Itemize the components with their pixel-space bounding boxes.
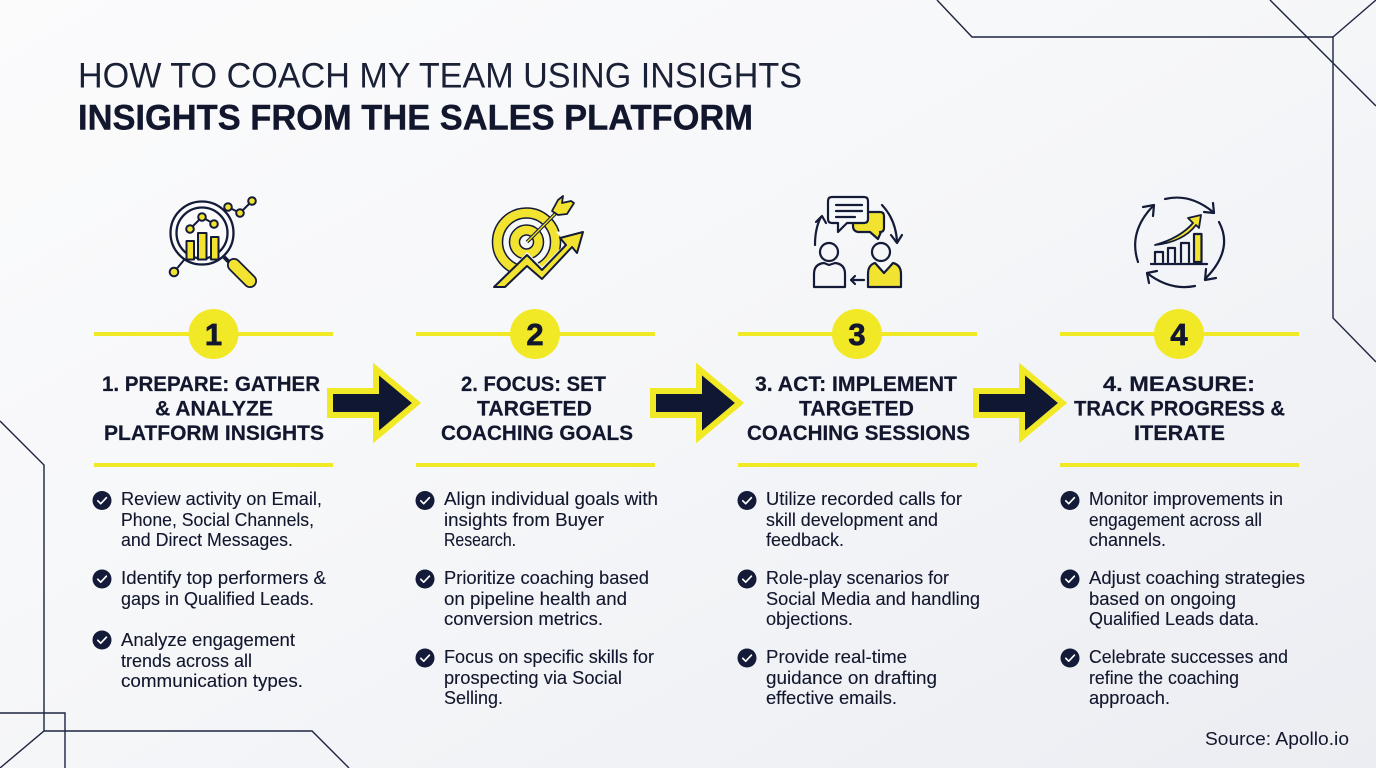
bullet 3.1: skill development and (766, 510, 938, 530)
bullet 4.1 (1060, 489, 1283, 550)
bullet 1.3 (92, 630, 303, 691)
arrow: step 3 to 4 (976, 369, 1062, 437)
heading: step 4: ITERATE (1134, 422, 1225, 445)
bullet 3.2: Social Media and handling (766, 589, 980, 609)
heading: step 2: COACHING GOALS (441, 422, 633, 445)
heading: step 3 (747, 373, 970, 445)
icon: conversation cycle (814, 197, 902, 287)
bullet 4.2: Adjust coaching strategies (1089, 568, 1305, 588)
bullet 4.3: approach. (1089, 688, 1170, 708)
bullet list: step 4 (1060, 489, 1305, 708)
bullet 3.2: objections. (766, 609, 853, 629)
bullet 4.2: based on ongoing (1089, 589, 1236, 609)
icon: growth chart cycle (1135, 198, 1224, 287)
bullet 2.3: prospecting via Social (444, 668, 622, 688)
heading: step 2 (441, 373, 633, 445)
bullet 3.1: Utilize recorded calls for (766, 489, 962, 509)
bullet 1.1: Review activity on Email, (121, 489, 322, 509)
bullet 1.1: Phone, Social Channels, (121, 510, 314, 530)
step number 1: 1 (205, 317, 222, 352)
step number 1 (94, 309, 333, 359)
heading: step 1: & ANALYZE (155, 398, 273, 420)
bullet 3.1 (738, 489, 962, 550)
title: INSIGHTS FROM THE SALES PLATFORM (78, 98, 753, 138)
panel: step 4 measure (1060, 198, 1305, 708)
bullet 2.3: Focus on specific skills for (444, 647, 654, 667)
bullet 1.1 (92, 489, 322, 550)
step number 4: 4 (1170, 317, 1188, 352)
icon: target with arrow (494, 196, 592, 295)
bullet 4.3 (1060, 647, 1288, 708)
bullet 2.2: on pipeline health and (444, 589, 627, 609)
bullet 1.3: communication types. (121, 671, 303, 691)
step number 3: 3 (848, 317, 866, 352)
bullet list: step 2 (416, 489, 658, 708)
bullet 2.1: insights from Buyer (444, 510, 604, 530)
bullet 3.2 (738, 568, 980, 629)
step number 2: 2 (526, 317, 544, 352)
bullet 4.1: channels. (1089, 530, 1166, 550)
bullet 4.2 (1060, 568, 1305, 629)
panel: step 2 focus (416, 196, 658, 708)
heading: step 1 (102, 373, 324, 445)
bullet 2.2: conversion metrics. (444, 609, 603, 629)
source note: Source: Apollo.io (1205, 729, 1349, 749)
bullet 2.2: Prioritize coaching based (444, 568, 649, 588)
title (78, 56, 802, 138)
bullet 1.1: and Direct Messages. (121, 530, 293, 550)
heading: step 3: TARGETED (799, 398, 914, 420)
arrow: step 2 to 3 (653, 369, 740, 437)
heading: step 4: TRACK PROGRESS & (1074, 398, 1285, 420)
panel: step 3 act (738, 197, 980, 708)
step number 2 (416, 309, 655, 359)
bullet 4.3: Celebrate successes and (1089, 647, 1288, 667)
heading: step 2: 2. FOCUS: SET (461, 373, 606, 396)
bullet 4.2: Qualified Leads data. (1089, 609, 1259, 629)
bullet 2.1: Align individual goals with (444, 489, 658, 509)
bullet 1.3: trends across all (121, 651, 252, 671)
bullet 1.3: Analyze engagement (121, 630, 295, 650)
heading: step 4: 4. MEASURE: (1103, 373, 1255, 396)
bullet 1.2: gaps in Qualified Leads. (121, 589, 314, 609)
bullet 3.2: Role-play scenarios for (766, 568, 949, 588)
heading: step 3: 3. ACT: IMPLEMENT (755, 373, 957, 396)
step number 3 (738, 309, 977, 359)
bullet 4.3: refine the coaching (1089, 668, 1239, 688)
bullet 4.1: engagement across all (1089, 510, 1262, 530)
step number 4 (1060, 309, 1299, 359)
bullet 2.1: Research. (444, 530, 516, 550)
panel: step 1 prepare (92, 197, 333, 691)
bullet 3.3: effective emails. (766, 688, 897, 708)
bullet 3.3 (738, 647, 937, 708)
icon: magnifying glass with chart (170, 197, 256, 281)
bullet 2.3: Selling. (444, 688, 503, 708)
heading: step 3: COACHING SESSIONS (747, 422, 970, 445)
heading: step 1: 1. PREPARE: GATHER (102, 373, 320, 396)
bullet list: step 3 (738, 489, 980, 708)
arrow: step 1 to 2 (330, 369, 416, 437)
heading: step 2: TARGETED (477, 398, 592, 420)
bullet 1.2 (92, 568, 326, 609)
bullet 2.2 (416, 568, 649, 629)
bullet 3.3: guidance on drafting (766, 668, 937, 688)
bullet 4.1: Monitor improvements in (1089, 489, 1283, 509)
title: HOW TO COACH MY TEAM USING INSIGHTS (78, 56, 802, 96)
bullet 3.1: feedback. (766, 530, 844, 550)
heading: step 4 (1074, 373, 1285, 445)
heading: step 1: PLATFORM INSIGHTS (104, 422, 324, 445)
bullet 1.2: Identify top performers & (121, 568, 326, 588)
bullet 3.3: Provide real-time (766, 647, 907, 667)
bullet 2.3 (416, 647, 654, 708)
bullet 2.1 (416, 489, 658, 550)
bullet list: step 1 (92, 489, 326, 691)
